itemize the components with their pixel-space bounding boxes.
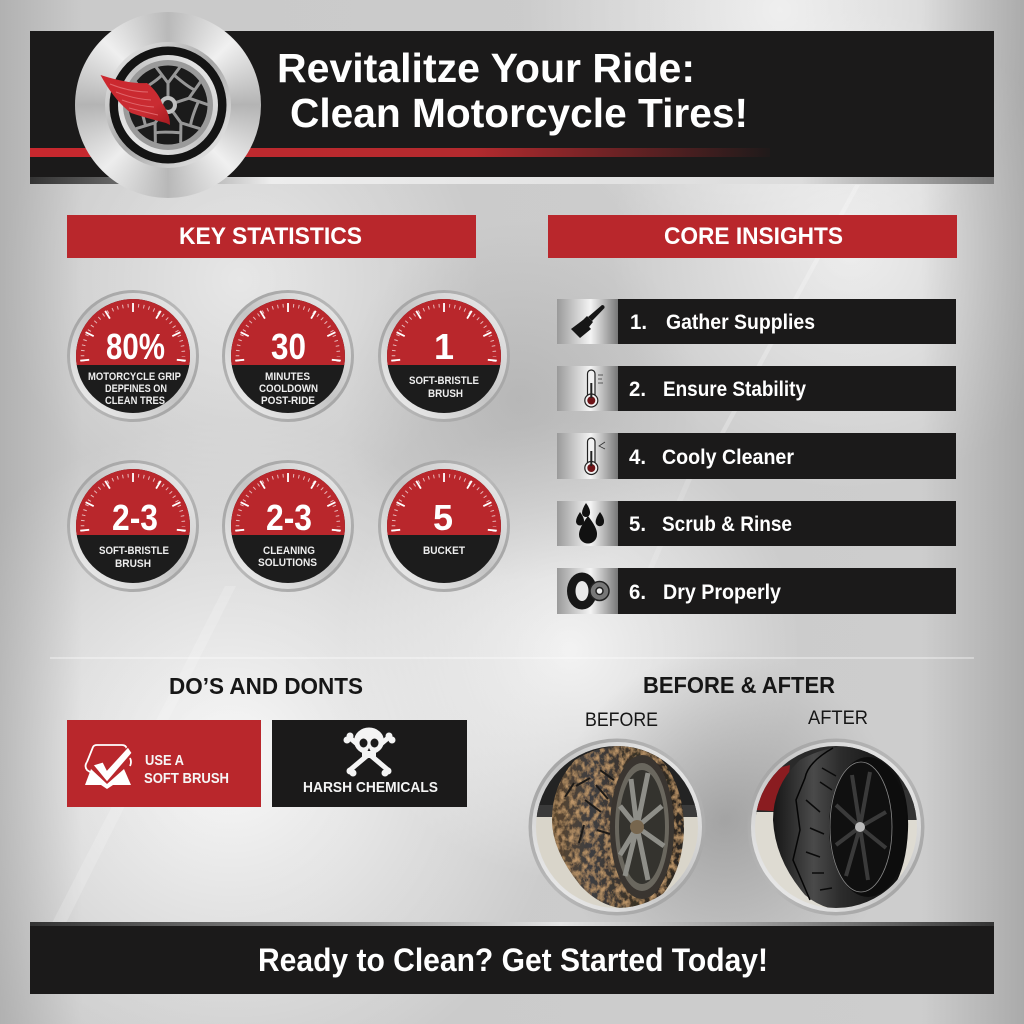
gauge: 2-3 solutions: CLEANING	[263, 545, 315, 557]
callout: harsh chemicals: HARSH CHEMICALS	[303, 779, 438, 796]
gauge: 2-3 brush	[67, 460, 199, 592]
gauge: 80%: MOTORCYCLE GRIP	[88, 371, 181, 383]
item: ensure stability: 2.	[629, 377, 646, 401]
panel: key statistics gauges	[67, 290, 510, 592]
gauge: 30: 30	[271, 326, 306, 367]
item: scrub and rinse	[557, 501, 956, 546]
icon: thermometer	[585, 370, 603, 407]
gauge: 1: BRUSH	[428, 388, 463, 400]
gauge: 30: MINUTES	[265, 371, 310, 383]
icon: thermometer cool	[585, 438, 605, 474]
callout: use a soft brush: SOFT BRUSH	[144, 771, 229, 787]
icon: brush	[571, 305, 605, 338]
item: dry properly: 6.	[629, 580, 646, 604]
gauge: 1: 1	[434, 326, 454, 367]
heading: key statistics	[67, 215, 476, 258]
item: cooly cleaner: 4.	[629, 445, 646, 469]
gauge: 5: BUCKET	[423, 545, 465, 557]
photo: clean tyre after	[748, 738, 924, 916]
photo: dirty tyre before	[528, 738, 706, 916]
callout: use a soft brush	[67, 720, 261, 807]
gauge: 2-3 brush: 2-3	[112, 497, 158, 538]
icon: skull and crossbones	[344, 728, 396, 776]
icon: brush with check	[85, 745, 132, 789]
item: dry properly	[557, 568, 956, 614]
header banner	[30, 31, 994, 184]
callout: harsh chemicals	[272, 720, 467, 807]
heading: before and after: BEFORE & AFTER	[643, 672, 835, 698]
label: before: BEFORE	[585, 710, 658, 731]
icon: tyre	[567, 572, 609, 610]
gauge: 80%: DEPFINES ON	[105, 383, 167, 395]
item: cooly cleaner	[557, 433, 956, 479]
gauge: 1: SOFT-BRISTLE	[409, 375, 479, 387]
gauge: 30: COOLDOWN	[259, 383, 318, 395]
item: scrub and rinse: Scrub & Rinse	[662, 512, 792, 536]
panel: core insights list	[557, 299, 956, 614]
gauge: 2-3 brush: BRUSH	[115, 558, 151, 570]
gauge: 30	[222, 290, 354, 422]
item: ensure stability	[557, 366, 956, 411]
gauge: 80%: CLEAN TRES	[105, 395, 165, 407]
label: after: AFTER	[808, 708, 868, 729]
title: Revitalitze Your Ride:	[277, 45, 695, 91]
heading: key statistics: KEY STATISTICS	[179, 223, 362, 250]
item: scrub and rinse: 5.	[629, 512, 646, 536]
gauge: 2-3 solutions	[222, 460, 354, 592]
gauge: 80%	[67, 290, 199, 422]
heading: core insights: CORE INSIGHTS	[664, 223, 843, 250]
gauge: 30: POST-RIDE	[261, 395, 315, 407]
footer banner	[30, 922, 994, 994]
footer banner: Ready to Clean? Get Started Today!	[258, 942, 768, 978]
heading: core insights	[548, 215, 957, 258]
item: gather supplies: Gather Supplies	[666, 310, 815, 334]
item: cooly cleaner: Cooly Cleaner	[662, 445, 795, 469]
item: gather supplies: 1.	[630, 310, 647, 334]
item: ensure stability: Ensure Stability	[663, 377, 806, 401]
gauge: 5	[378, 460, 510, 592]
icon: winged wheel logo	[75, 12, 261, 198]
item: dry properly: Dry Properly	[663, 580, 781, 604]
gauge: 2-3 brush: SOFT-BRISTLE	[99, 545, 169, 557]
title	[277, 45, 748, 136]
gauge: 80%: 80%	[106, 326, 165, 367]
gauge: 2-3 solutions: SOLUTIONS	[258, 557, 317, 569]
gauge: 1	[378, 290, 510, 422]
item: gather supplies	[557, 299, 956, 344]
title: Clean Motorcycle Tires!	[290, 90, 748, 136]
callout: use a soft brush: USE A	[145, 753, 184, 769]
heading: dos and donts: DO’S AND DONTS	[169, 673, 363, 699]
gauge: 5: 5	[433, 497, 453, 538]
icon: water drops	[576, 503, 604, 544]
gauge: 2-3 solutions: 2-3	[266, 497, 312, 538]
